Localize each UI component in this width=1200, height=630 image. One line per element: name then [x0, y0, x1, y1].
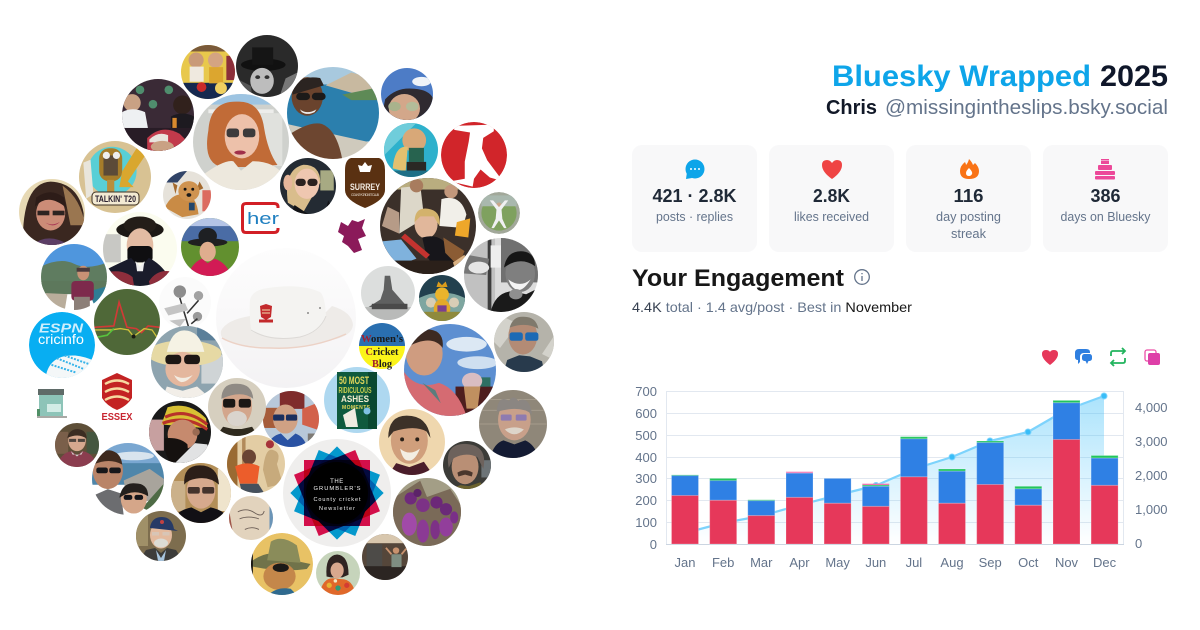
avatar: black-capped academic in mask — [103, 212, 177, 286]
avatar: man with blue sunglasses — [494, 312, 554, 372]
month labels: Nov — [1055, 555, 1079, 570]
icon: likes heart — [1042, 350, 1058, 365]
avatar: man with red cap at bookcase — [136, 511, 186, 561]
month labels: Aug — [940, 555, 964, 570]
user name and handle: @missingintheslips.bsky.social — [885, 97, 1168, 119]
left axis labels — [635, 384, 657, 552]
avatar: Women's Cricket Blog logo — [359, 323, 405, 370]
left axis labels: 700 — [635, 384, 657, 399]
avatar: man in burgundy sweater — [55, 423, 99, 467]
right axis labels: 1,000 — [1135, 502, 1168, 517]
avatar: Women's Cricket Blog logo: Cricket — [366, 347, 399, 358]
right axis labels — [1135, 400, 1168, 551]
avatar: Talkin' T20 podcast logo: TALKIN' T20 — [95, 194, 136, 205]
icon: quotes squares — [1145, 350, 1160, 365]
right axis labels: 4,000 — [1135, 400, 1168, 415]
stat card: posts and replies: posts · replies — [656, 209, 733, 224]
cumulative area — [685, 396, 1104, 544]
month labels: Dec — [1093, 555, 1117, 570]
stacked bars — [672, 400, 1118, 544]
avatar: woman with red hair and glasses — [193, 94, 289, 190]
avatar: black and white man in hat — [236, 35, 298, 97]
month labels — [675, 555, 1117, 570]
icon: flame — [960, 159, 979, 179]
avatar cloud — [19, 35, 538, 385]
bar Nov — [1053, 400, 1080, 544]
avatar: couple in sunglasses by the sea — [92, 443, 164, 515]
avatar: small town illustration — [37, 389, 67, 418]
stat card: days on Bluesky: days on Bluesky — [1060, 209, 1151, 224]
avatar: purple aubergine baubles — [393, 478, 461, 546]
avatar: press conference — [122, 79, 194, 152]
stat card: likes received: likes received — [794, 209, 869, 224]
bar Sep — [977, 441, 1004, 544]
stat card: days on Bluesky: 386 — [1090, 186, 1120, 206]
avatar: ship in grey — [361, 266, 415, 320]
stat card: likes received: 2.8K — [813, 186, 850, 206]
month labels: Oct — [1018, 555, 1039, 570]
stat card: day posting streak: day posting — [936, 209, 1001, 224]
avatar: The Grumbler's County cricket Newsletter logo — [283, 439, 391, 547]
avatar: woman with wide white hat — [147, 326, 223, 398]
left axis labels: 300 — [635, 471, 657, 486]
avatar: her logo: her — [247, 209, 279, 228]
stat card: posts and replies — [632, 145, 757, 252]
avatar: room with presenter — [362, 534, 408, 580]
month labels: Jun — [865, 555, 886, 570]
bar Oct — [1015, 486, 1042, 544]
month labels: Feb — [712, 555, 734, 570]
engagement summary: 4.4K total · 1.4 avg/post · Best in November — [632, 299, 912, 315]
avatar: man with blue shades at the ground — [263, 391, 319, 447]
avatar: The Grumbler's County cricket Newsletter logo: GRUMBLER'S — [314, 486, 361, 492]
cumulative line — [685, 396, 1104, 533]
avatar: person in floral shirt — [316, 551, 360, 595]
avatar: ESPNcricinfo logo: ESPN — [39, 320, 84, 336]
avatar: woman with book on a boat — [380, 178, 476, 274]
stat card: day posting streak: 116 — [954, 186, 984, 206]
left axis labels: 500 — [635, 428, 657, 443]
avatar: Talkin' T20 podcast logo — [79, 141, 151, 213]
avatar: bald man with heavy black glasses — [208, 378, 266, 436]
avatar: 50 Most Ridiculous Ashes Moments book: 50 MOST — [339, 375, 369, 387]
month labels: Jul — [906, 555, 922, 570]
bar May — [824, 478, 851, 544]
avatar: black and white laughing man — [464, 238, 538, 312]
avatar: Surrey shield logo: COUNTY CRICKET CLUB — [351, 193, 380, 197]
avatar: 50 Most Ridiculous Ashes Moments book: RIDICULOUS — [338, 386, 372, 395]
title: 2025 — [1100, 60, 1168, 93]
central hat and remaining avatars — [37, 248, 554, 595]
avatar: Surrey shield logo — [345, 158, 385, 208]
avatar: woman short dark hair and glasses — [171, 463, 231, 523]
right axis labels: 2,000 — [1135, 468, 1168, 483]
avatar: Essex crest — [102, 373, 132, 423]
avatar: Women's Cricket Blog logo: Blog — [372, 359, 393, 370]
avatar: person in a green garden — [478, 192, 520, 234]
central avatar: white cricket hat — [216, 248, 356, 388]
avatar: red cricket batter logo — [441, 122, 507, 188]
avatar: Women's Cricket Blog logo: Women's — [361, 334, 403, 345]
legend icons — [1042, 348, 1160, 366]
avatar: cartoon on teal — [384, 123, 438, 177]
avatar: smiling man on cream — [379, 409, 445, 475]
month labels: Apr — [789, 555, 810, 570]
avatar: paper with handwriting — [229, 496, 273, 540]
title: Bluesky Wrapped — [832, 60, 1091, 93]
avatar: Surrey shield logo: SURREY — [350, 182, 380, 192]
user name and handle: Chris — [826, 97, 877, 119]
heading: your engagement: Your Engagement — [632, 265, 844, 292]
icon: heart — [822, 160, 842, 179]
avatar: 50 Most Ridiculous Ashes Moments book: ASHES — [341, 394, 369, 404]
icon: birthday cake — [1095, 159, 1115, 180]
right axis labels: 3,000 — [1135, 434, 1168, 449]
avatar: Welsh dragon crest — [338, 219, 366, 253]
avatar: umpire in hat — [181, 218, 239, 276]
avatar: cartoon man with brown hat — [251, 533, 313, 595]
line points — [873, 393, 1107, 488]
right axis labels: 0 — [1135, 536, 1142, 551]
left axis labels: 100 — [635, 515, 657, 530]
icon: info — [855, 270, 869, 284]
avatar: man in pink polo with ice cream — [404, 324, 498, 416]
avatar: woman with long dark hair — [19, 179, 85, 245]
avatar: woman with glasses in car — [280, 158, 336, 214]
bar Dec — [1091, 456, 1118, 544]
avatar: Essex crest: ESSEX — [102, 411, 132, 423]
icon: reposts arrows — [1111, 348, 1125, 366]
stat card: day posting streak: streak — [951, 226, 986, 241]
stat card: days on Bluesky — [1043, 145, 1168, 252]
avatar: bearded man in striped cap — [149, 401, 211, 463]
grid lines — [666, 391, 1124, 544]
stat card: day posting streak — [906, 145, 1031, 252]
avatar: man by the sea — [287, 67, 379, 159]
avatar: The Grumbler's County cricket Newsletter logo: Newsletter — [319, 506, 355, 512]
avatar: ESPNcricinfo logo: cricinfo — [38, 332, 84, 347]
left axis labels: 600 — [635, 406, 657, 421]
avatar: orange shirt man and dog — [227, 435, 285, 493]
month labels: Sep — [979, 555, 1002, 570]
bar Apr — [786, 472, 813, 544]
avatar: man with glasses against bricks — [479, 390, 547, 458]
icon: speech bubble — [686, 160, 704, 179]
avatar: man on mountain view — [41, 244, 107, 310]
avatar: engraving of thistle plant — [164, 285, 204, 327]
left axis labels: 200 — [635, 493, 657, 508]
bar Jul — [900, 437, 927, 544]
avatar: dog — [163, 171, 211, 219]
stat card: posts and replies: 421 · 2.8K — [652, 186, 736, 206]
avatar: ESPNcricinfo logo — [29, 312, 95, 378]
bar Mar — [748, 500, 775, 544]
month labels: Mar — [750, 555, 773, 570]
avatar: 50 Most Ridiculous Ashes Moments book: MOMENTS — [342, 405, 371, 411]
bar Aug — [938, 469, 966, 544]
month labels: Jan — [675, 555, 695, 570]
avatar: 50 Most Ridiculous Ashes Moments book — [324, 367, 390, 433]
avatar: team poster yellow — [181, 45, 235, 99]
left axis labels: 400 — [635, 450, 657, 465]
avatar: her logo — [242, 204, 279, 232]
bar Jun — [862, 484, 889, 544]
avatar: The Grumbler's County cricket Newsletter logo: THE — [330, 479, 344, 485]
left axis labels: 0 — [650, 537, 657, 552]
icon: replies chat — [1075, 349, 1092, 364]
avatar: yellow ducks — [419, 275, 465, 321]
bar Jan — [672, 475, 698, 544]
stat card: likes received — [769, 145, 894, 252]
bar Feb — [710, 478, 737, 544]
month labels: May — [825, 555, 850, 570]
avatar: green pitch with line chart — [94, 289, 160, 355]
avatar: sky and aviators — [381, 68, 433, 123]
engagement chart — [635, 384, 1168, 570]
avatar: The Grumbler's County cricket Newsletter logo: County cricket — [314, 497, 361, 503]
avatar: man with moustache — [443, 441, 491, 489]
